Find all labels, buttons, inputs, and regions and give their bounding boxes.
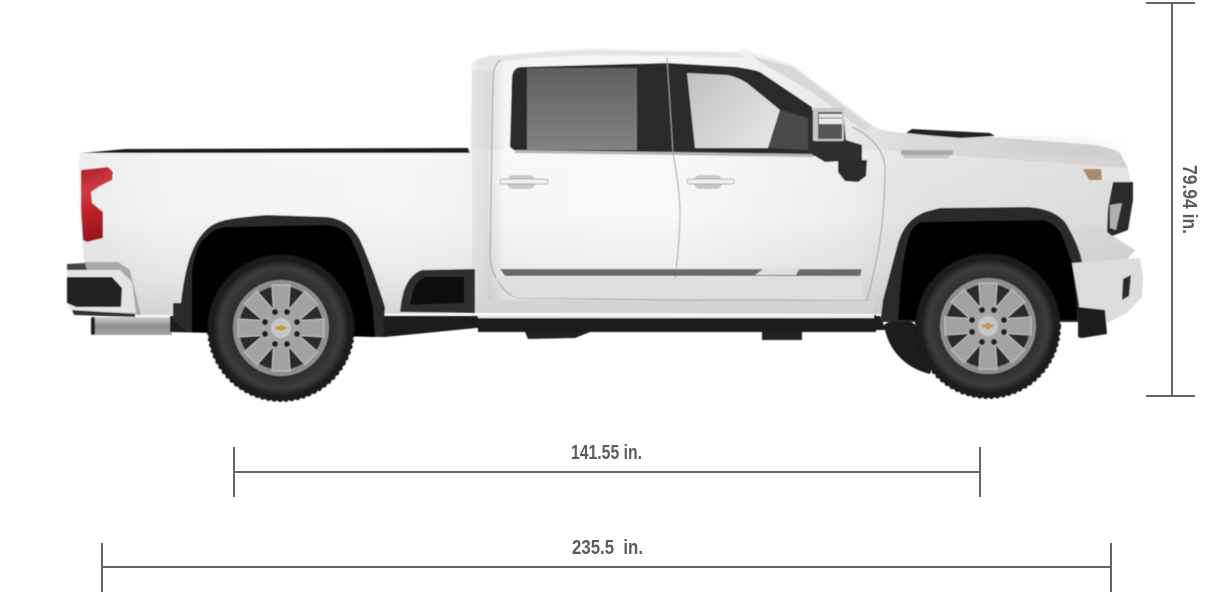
far side front tyre — [884, 315, 940, 374]
rear tyre — [208, 255, 354, 401]
side mirror — [808, 108, 867, 182]
cowl vent — [906, 129, 995, 138]
wheelbase dimension — [234, 442, 980, 497]
rear wheel well — [173, 215, 385, 337]
roof highlight — [476, 50, 748, 72]
rear wheel well interior — [192, 225, 375, 337]
body shading — [80, 150, 1135, 315]
door cut lines — [490, 57, 885, 300]
window frame — [510, 63, 814, 156]
front wheel well — [880, 207, 1082, 325]
exhaust pipe — [91, 317, 172, 335]
underbody — [170, 316, 886, 337]
front rim — [940, 278, 1036, 374]
seat silhouette — [768, 110, 808, 150]
cab rear corner — [472, 70, 488, 313]
rear cab cutout — [400, 269, 475, 313]
tail light — [81, 167, 113, 242]
door handles — [500, 175, 734, 189]
front window glass — [687, 73, 780, 148]
rear rim — [233, 280, 329, 376]
front tyre — [916, 254, 1060, 398]
height label: 79.94 in. — [1178, 165, 1200, 234]
windshield pillar shading — [752, 56, 871, 130]
grille chrome — [1110, 203, 1122, 230]
bed top rail — [82, 148, 470, 153]
headlight — [1083, 167, 1128, 182]
running board — [478, 315, 876, 340]
rear window glass — [527, 68, 637, 150]
front bumper — [1072, 258, 1143, 338]
grille — [1107, 182, 1133, 236]
hood crease — [993, 139, 1120, 156]
rear bumper — [67, 262, 141, 317]
door lower shading — [495, 278, 865, 300]
overall length label: 235.5 in. — [572, 537, 643, 559]
truck body — [79, 48, 1135, 318]
rear cab cutout dark — [410, 277, 464, 305]
body side moulding — [500, 268, 862, 276]
truck — [67, 48, 1143, 401]
height dimension — [1146, 3, 1200, 396]
wheelbase label: 141.55 in. — [571, 442, 642, 464]
front wheel well interior — [898, 220, 1077, 320]
rocker panel — [477, 300, 875, 313]
overall length dimension — [102, 537, 1111, 592]
window sill trim — [515, 150, 813, 157]
fender badge — [901, 150, 953, 158]
